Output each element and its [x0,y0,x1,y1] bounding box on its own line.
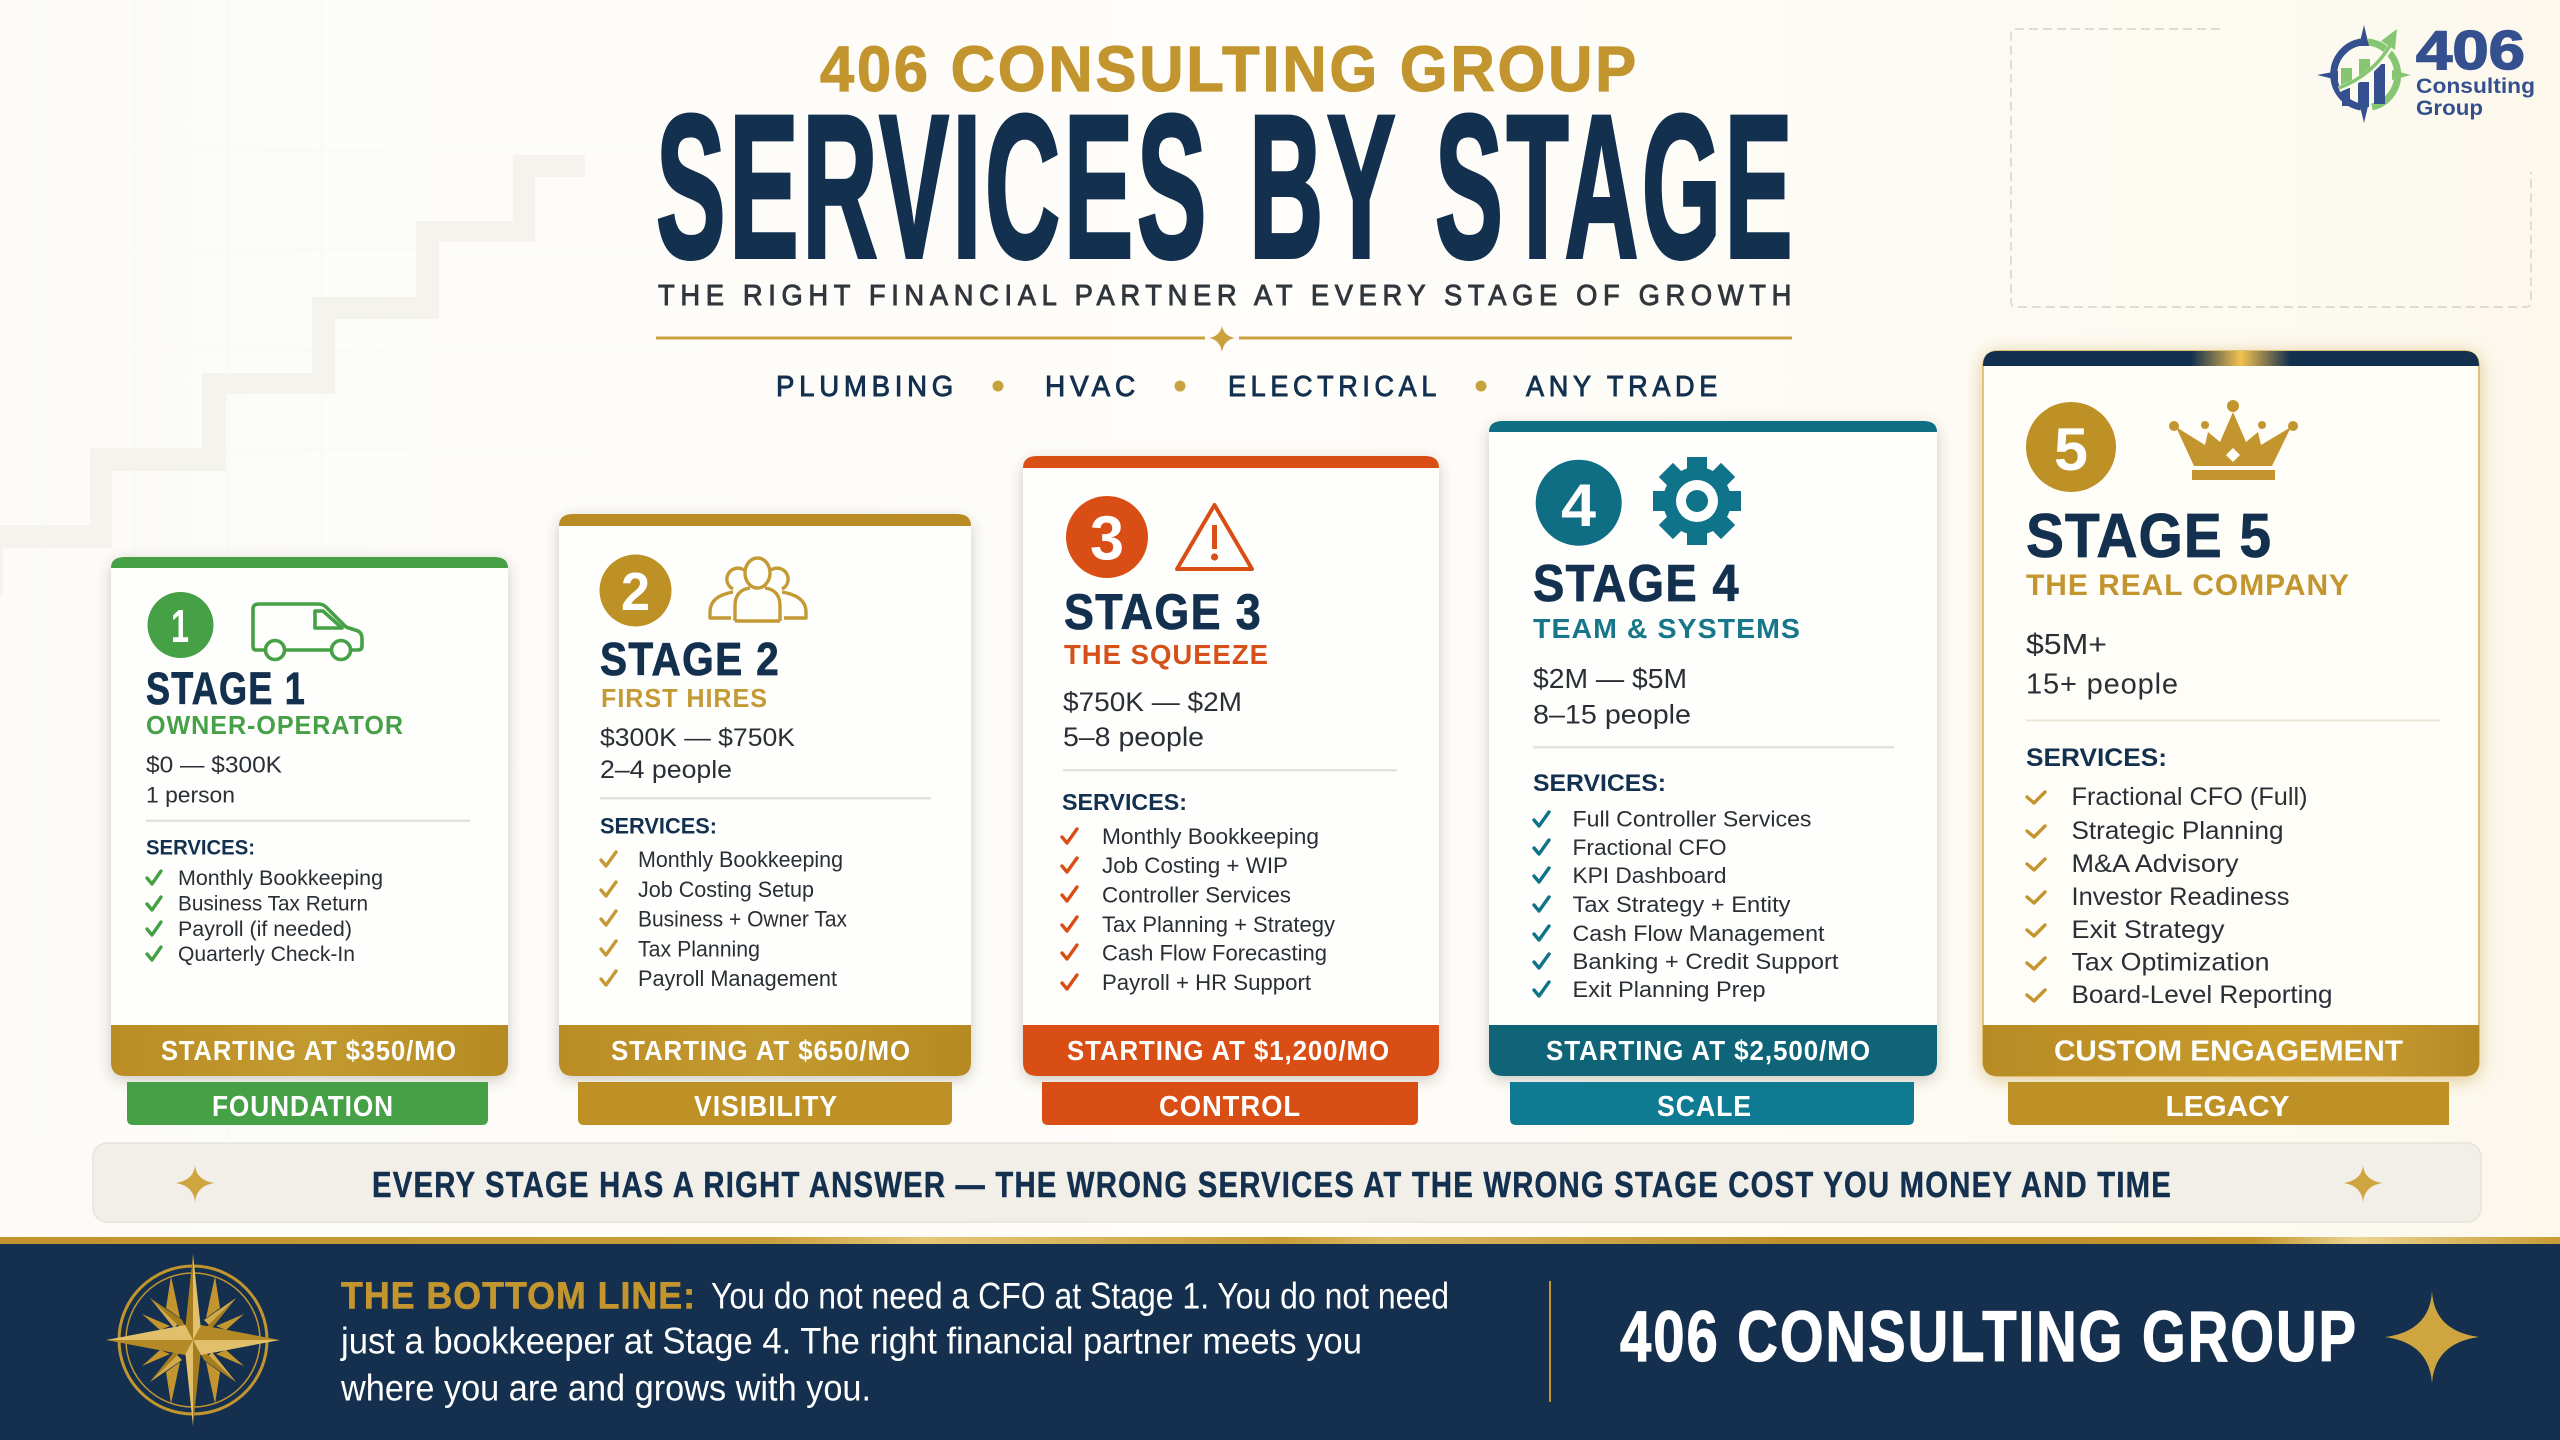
stage 2 services list: Tax Planning [638,936,760,962]
stage 5 services list: Tax Optimization [2072,948,2270,976]
stage 5 services list: Board-Level Reporting [2072,981,2332,1009]
stage 5 heading: STAGE 5 [2026,502,2272,571]
background staircase motif [0,155,585,596]
stage 1 card body [111,557,508,1076]
stage 1 top bar [111,557,508,568]
stage 1 services list: Monthly Bookkeeping [178,867,383,890]
stage 3 services list: SERVICES: [1062,789,1187,815]
stage 3 subtitle: THE SQUEEZE [1064,639,1269,670]
stage 5 price band: CUSTOM ENGAGEMENT [2054,1036,2403,1068]
stage 4 card body [1489,421,1937,1076]
stage 2 services list: Job Costing Setup [638,877,814,902]
stage 2 label pill: visibility [578,1082,952,1125]
stage 3 services list: Monthly Bookkeeping [1102,824,1319,849]
stage 1 number badge: 1 [171,600,189,652]
stage 3 revenue and headcount: $750K — $2M [1063,687,1242,717]
stage 2 revenue and headcount: 2–4 people [600,756,732,784]
stage 1 services list [146,836,383,966]
stage 4 services list: Cash Flow Management [1572,921,1824,946]
stage 5 revenue and headcount: 15+ people [2026,668,2178,700]
stage 3 label pill: control [1042,1082,1418,1125]
stage 4 top bar [1489,421,1937,432]
bottom line statement: just a bookkeeper at Stage 4. The right financial partner meets you [340,1320,1362,1362]
stage 2 services list [600,814,847,991]
stage 4 services list: Banking + Credit Support [1572,949,1838,974]
trades line [776,371,1722,403]
stage 4 revenue and headcount: $2M — $5M [1533,663,1687,694]
stage 5 label pill: legacy: LEGACY [2166,1091,2290,1123]
stage 2 label pill: visibility: VISIBILITY [694,1091,838,1123]
stage 1 heading: STAGE 1 [146,663,306,714]
stage 2 services list: Business + Owner Tax [638,906,847,932]
stage 4 services list: Exit Planning Prep [1572,977,1766,1002]
stage 3 services list: Tax Planning + Strategy [1102,912,1335,937]
trades line: ANY TRADE [1526,371,1722,403]
stage 5 subtitle: THE REAL COMPANY [2026,569,2350,602]
stage 4 number badge [1536,460,1622,546]
panel: stage 1 [111,557,508,1125]
stage 4 services list: SERVICES: [1533,770,1666,797]
stage 2 card body [559,514,971,1076]
logo wordmark: Group [2416,97,2483,120]
icon: gold compass rose [106,1254,280,1426]
stage 2 heading: STAGE 2 [600,633,780,685]
icon: warning triangle [1177,505,1252,569]
stage 5 label pill: legacy [2008,1082,2449,1125]
stage 2 top bar [559,514,971,526]
stage 3 services list: Job Costing + WIP [1102,853,1288,878]
main title: SERVICES [656,73,1210,301]
stage 2 revenue and headcount: $300K — $750K [600,724,795,752]
stage 5 services list: Investor Readiness [2072,883,2290,911]
stage 5 card body [1983,351,2479,1076]
stage 4 services list: KPI Dashboard [1572,863,1726,888]
icon: footer gold star [2385,1291,2479,1383]
stage 1 subtitle: OWNER-OPERATOR [146,710,404,740]
stage 2 services list: SERVICES: [600,814,717,838]
stage 3 number badge: 3 [1090,504,1124,574]
stage 5 services list: Exit Strategy [2072,916,2225,944]
dashed placeholder frame [2011,29,2531,307]
footer company name: 406 CONSULTING GROUP [1620,1298,2358,1377]
stage 3 top bar [1023,456,1439,468]
stage 5 number badge [2026,402,2116,492]
stage 4 label pill: scale: SCALE [1657,1091,1752,1123]
stage 4 subtitle: TEAM & SYSTEMS [1533,613,1801,644]
stage 4 price band: STARTING AT $2,500/MO [1546,1035,1871,1066]
panel: stage 5 [1983,351,2479,1125]
stage 3 services list [1062,789,1335,995]
panel: stage 4 [1489,421,1937,1125]
stage 1 revenue and headcount: 1 person [146,782,235,808]
stage 1 price band: STARTING AT $350/MO [161,1035,457,1066]
panel: stage 3 [1023,456,1439,1125]
stage 5 services list: SERVICES: [2026,744,2167,772]
stage 1 services list: Payroll (if needed) [178,918,352,941]
stage 2 number badge [600,554,672,626]
bottom line statement: THE BOTTOM LINE: [341,1276,696,1318]
stage 5 price band [1983,1025,2479,1076]
stage 4 services list: Tax Strategy + Entity [1572,892,1790,917]
bottom line statement: where you are and grows with you. [340,1368,871,1408]
stage 1 price band [111,1025,508,1076]
callout banner: every stage has a right answer [93,1143,2481,1222]
stage 5 top bar [1983,351,2479,366]
text: STAGE [1435,73,1796,301]
stage 5 services list: M&A Advisory [2072,850,2239,878]
stage 2 services list: Monthly Bookkeeping [638,847,843,872]
stage 3 services list: Payroll + HR Support [1102,970,1311,995]
stage 3 heading: STAGE 3 [1064,584,1262,640]
header eyebrow: company name: 406 CONSULTING GROUP [820,33,1639,105]
stage 5 services list: Strategic Planning [2072,817,2284,845]
icon: compass with growth chart [2317,25,2411,123]
banner text: EVERY STAGE HAS A RIGHT ANSWER — THE WRONG SERVICES AT THE WRONG STAGE COST YOU MONEY AND TIME [372,1164,2172,1205]
stage 1 revenue and headcount [146,752,283,808]
icon: gear [1653,457,1741,545]
stage 2 revenue and headcount [600,724,795,784]
logo: 406 Consulting Group [2317,19,2535,123]
stage 4 label pill: scale [1510,1082,1914,1125]
stage 1 number badge [148,592,214,658]
stage 5 services list [2026,744,2332,1009]
stage 4 heading: STAGE 4 [1533,555,1740,613]
icon: left star [176,1165,214,1202]
stage 3 label pill: control: CONTROL [1159,1091,1301,1123]
bottom line statement [340,1276,1449,1408]
stage 2 subtitle: FIRST HIRES [601,683,768,713]
stage 5 revenue and headcount [2026,629,2178,700]
stage 1 label pill: foundation [127,1082,488,1125]
footer panel: the bottom line [0,1237,2560,1440]
stage 5 revenue and headcount: $5M+ [2026,629,2107,661]
stage 4 revenue and headcount [1533,663,1691,730]
stage 1 label pill: foundation: FOUNDATION [212,1091,394,1123]
stage 4 revenue and headcount: 8–15 people [1533,700,1691,730]
subtitle: THE RIGHT FINANCIAL PARTNER AT EVERY STAGE OF GROWTH [658,280,1797,312]
stage 4 services list: Full Controller Services [1572,806,1812,832]
stage 2 price band: STARTING AT $650/MO [611,1035,911,1066]
stage 3 card body [1023,456,1439,1076]
stage 3 number badge [1066,496,1148,578]
logo wordmark: 406 [2416,19,2525,81]
stage 1 revenue and headcount: $0 — $300K [146,752,283,778]
stage 3 price band: STARTING AT $1,200/MO [1067,1035,1390,1066]
stage 1 services list: Quarterly Check-In [178,943,355,966]
bottom line statement: You do not need a CFO at Stage 1. You do not need [711,1276,1449,1316]
panel: stage 2 [559,514,971,1125]
stage 3 revenue and headcount [1063,687,1242,752]
stage 3 price band [1023,1025,1439,1076]
trades line: HVAC [1045,371,1140,403]
logo wordmark [2416,19,2535,120]
icon: people [710,558,806,621]
icon: right star [2344,1165,2382,1202]
gold divider with star [656,326,1792,352]
stage 2 services list: Payroll Management [638,966,837,991]
stage 3 revenue and headcount: 5–8 people [1063,722,1204,752]
logo wordmark: Consulting [2416,75,2535,98]
stage 1 services list: Business Tax Return [178,892,368,916]
trades line: ELECTRICAL [1228,371,1441,403]
stage 4 number badge: 4 [1561,472,1597,539]
trades line: PLUMBING [776,371,958,403]
stage 3 services list: Cash Flow Forecasting [1102,940,1327,966]
stage 4 services list [1533,770,1838,1002]
stage 1 services list: SERVICES: [146,836,255,860]
stage 5 number badge: 5 [2054,416,2088,483]
main title: BY [1249,73,1399,301]
stage 2 price band [559,1025,971,1076]
icon: van [253,604,362,660]
stage 4 services list: Fractional CFO [1572,835,1726,860]
stage 5 services list: Fractional CFO (Full) [2072,783,2308,811]
stage 4 price band [1489,1025,1937,1076]
icon: crown [2169,400,2298,480]
stage 2 number badge: 2 [621,562,650,622]
stage 3 services list: Controller Services [1102,882,1291,908]
